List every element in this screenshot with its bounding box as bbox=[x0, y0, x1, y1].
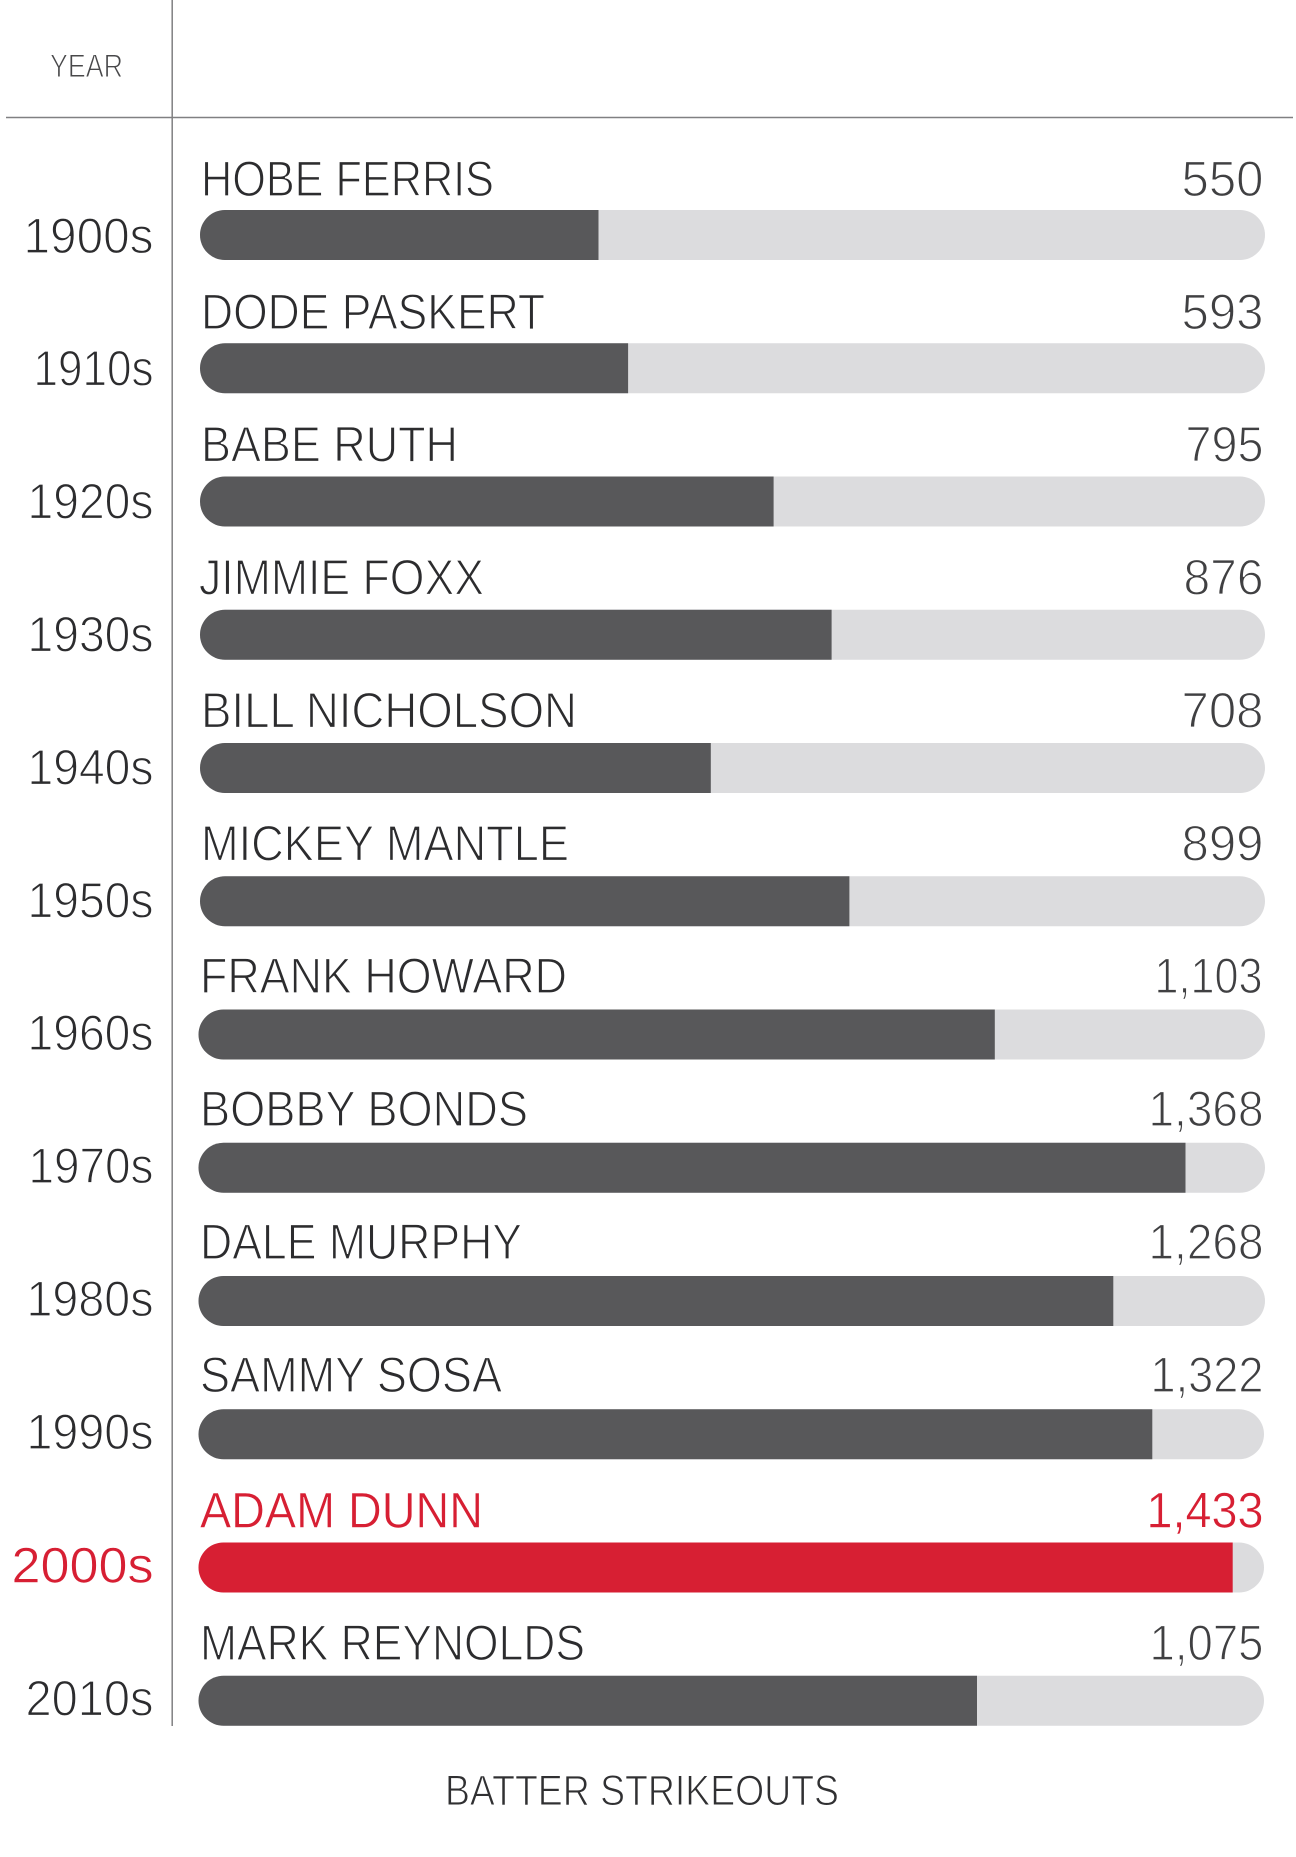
decade label: 1980s bbox=[26, 1270, 154, 1327]
row: 1960s Frank Howard bbox=[28, 947, 1265, 1061]
decade label: 2000s bbox=[12, 1536, 154, 1594]
row: 1990s Sammy Sosa bbox=[26, 1346, 1264, 1460]
strikeout value: 708 bbox=[1182, 682, 1264, 738]
bar value bbox=[198, 1409, 1152, 1459]
bar value bbox=[200, 743, 711, 793]
bar track bbox=[198, 1409, 1264, 1459]
bar track bbox=[198, 1276, 1265, 1326]
bar value bbox=[198, 1276, 1113, 1326]
decade label: 1900s bbox=[24, 207, 154, 264]
bar track bbox=[200, 743, 1265, 793]
bar value bbox=[200, 210, 598, 260]
bar value bbox=[198, 1542, 1233, 1592]
bar track bbox=[198, 1143, 1265, 1193]
bar track bbox=[198, 1676, 1264, 1726]
row: 2010s Mark Reynolds bbox=[26, 1614, 1264, 1726]
row: 1900s Hobe Ferris bbox=[24, 150, 1265, 264]
strikeout value: 1,103 bbox=[1154, 947, 1262, 1004]
bar track bbox=[198, 1542, 1264, 1592]
bar track bbox=[200, 476, 1265, 526]
player name: MARK REYNOLDS bbox=[200, 1614, 585, 1671]
decade label: 1940s bbox=[28, 738, 154, 795]
player name: FRANK HOWARD bbox=[200, 947, 567, 1004]
player name: MICKEY MANTLE bbox=[201, 814, 569, 872]
decade label: 1920s bbox=[28, 472, 154, 529]
row: 1920s Babe Ruth bbox=[28, 416, 1265, 529]
bar value bbox=[200, 876, 849, 926]
player name: DALE MURPHY bbox=[200, 1213, 522, 1270]
decade label: 1960s bbox=[28, 1004, 154, 1061]
row: 1950s Mickey Mantle bbox=[28, 814, 1265, 928]
bar value bbox=[200, 343, 628, 393]
bar value bbox=[198, 1676, 977, 1726]
strikeout value: 1,433 bbox=[1146, 1482, 1264, 1538]
bar track bbox=[198, 1010, 1265, 1060]
player name: JIMMIE FOXX bbox=[199, 548, 484, 606]
row: 1910s Dode Paskert bbox=[34, 283, 1265, 396]
bar value bbox=[200, 476, 774, 526]
strikeout value: 1,368 bbox=[1148, 1080, 1264, 1137]
decade label: 1910s bbox=[34, 340, 154, 396]
strikeout value: 593 bbox=[1182, 283, 1264, 340]
player name: BABE RUTH bbox=[201, 416, 458, 472]
player name: BOBBY BONDS bbox=[200, 1080, 528, 1137]
column heading: year: YEAR bbox=[50, 48, 123, 84]
bar track bbox=[200, 610, 1265, 660]
axis title: batter strikeouts: BATTER STRIKEOUTS bbox=[445, 1767, 839, 1815]
bar value bbox=[200, 610, 832, 660]
bar value bbox=[198, 1010, 995, 1060]
player name: ADAM DUNN bbox=[200, 1482, 483, 1538]
bar value bbox=[198, 1143, 1185, 1193]
row: 1940s Bill Nicholson bbox=[28, 682, 1265, 795]
player name: SAMMY SOSA bbox=[200, 1346, 502, 1403]
player name: DODE PASKERT bbox=[201, 283, 545, 340]
strikeout value: 1,075 bbox=[1150, 1614, 1264, 1671]
bar track bbox=[200, 343, 1265, 393]
row: 1980s Dale Murphy bbox=[26, 1213, 1265, 1327]
strikeout value: 1,268 bbox=[1148, 1213, 1264, 1270]
row: 1970s Bobby Bonds bbox=[28, 1080, 1265, 1194]
decade label: 2010s bbox=[26, 1670, 154, 1726]
strikeout value: 1,322 bbox=[1150, 1346, 1264, 1403]
decade label: 1970s bbox=[28, 1137, 154, 1194]
row: 1930s Jimmie Foxx bbox=[28, 548, 1265, 662]
bar track bbox=[200, 210, 1265, 260]
strikeout value: 550 bbox=[1182, 150, 1264, 207]
player name: BILL NICHOLSON bbox=[201, 682, 577, 738]
row: 2000s Adam Dunn (highlighted) bbox=[12, 1482, 1264, 1594]
decade label: 1950s bbox=[28, 871, 154, 928]
bar track bbox=[200, 876, 1265, 926]
player name: HOBE FERRIS bbox=[201, 150, 494, 207]
strikeout value: 876 bbox=[1184, 548, 1264, 606]
decade label: 1930s bbox=[28, 605, 154, 662]
strikeout value: 795 bbox=[1186, 416, 1264, 472]
decade label: 1990s bbox=[26, 1403, 154, 1460]
strikeout value: 899 bbox=[1182, 814, 1264, 872]
